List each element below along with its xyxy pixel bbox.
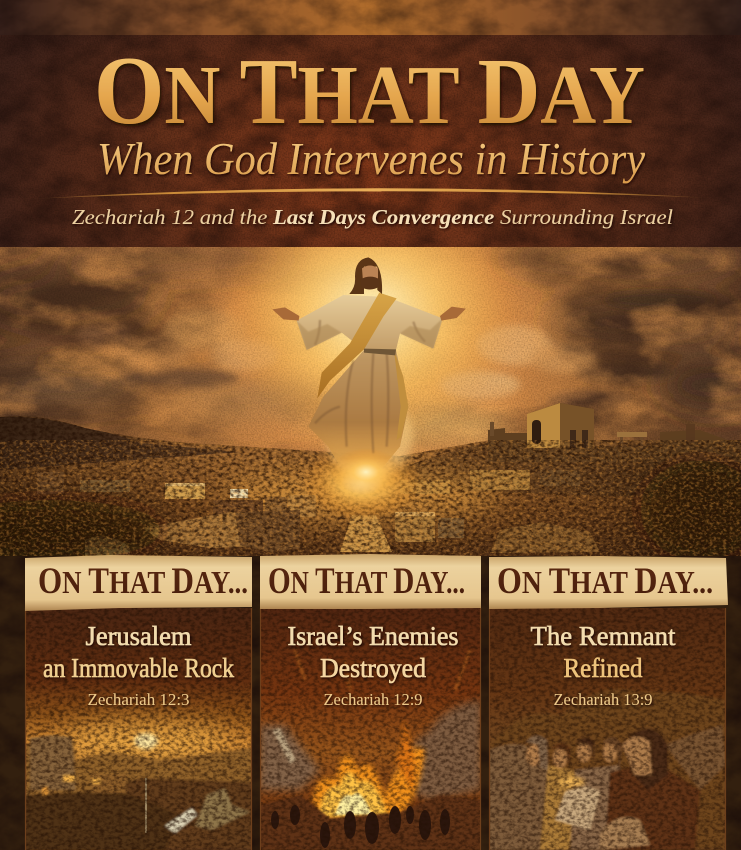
card 2 text: Zechariah 12:9: [324, 690, 422, 709]
card 3 text: [530, 621, 676, 709]
hero illustration: [0, 185, 741, 560]
sleeve shadow: [297, 321, 342, 350]
card 3 text: Refined: [564, 653, 643, 683]
robe body: [297, 295, 443, 477]
banner 2: ON THAT DAY...: [268, 561, 465, 602]
card 1 text: Zechariah 12:3: [88, 690, 190, 709]
card 1 text: Jerusalem: [86, 621, 192, 651]
billowing clouds: [40, 291, 715, 408]
card 3 text: Zechariah 13:9: [554, 690, 652, 709]
card 2 scene: [260, 608, 481, 850]
banner 1: [25, 555, 252, 611]
card 1 text: an Immovable Rock: [43, 653, 234, 683]
city ground: [0, 410, 741, 560]
dark foreground edges: [0, 460, 741, 560]
face: [362, 266, 378, 278]
subtitle: When God Intervenes in History: [97, 133, 646, 184]
banner 3: ON THAT DAY...: [497, 561, 713, 602]
robe folds: [315, 320, 425, 453]
tagline: Zechariah 12 and the Last Days Convergence Surrounding Israel: [72, 205, 673, 229]
lower background: [0, 556, 741, 850]
rubble and hill texture: [0, 410, 741, 560]
banner 1: ON THAT DAY...: [38, 561, 248, 602]
header panel: [0, 35, 741, 247]
panel: Jerusalem an Immovable Rock: [25, 554, 728, 850]
sky: [0, 244, 741, 462]
card 2 text: Israel’s Enemies: [288, 621, 458, 651]
card borders: [26, 608, 726, 850]
card 1 scene: [25, 608, 252, 850]
card 2 text: Destroyed: [320, 653, 426, 683]
hair: [349, 257, 382, 294]
card 3 scene: [489, 608, 726, 850]
card 1 text: [43, 621, 234, 709]
figure base glow: [336, 451, 396, 493]
top texture strip: [0, 0, 741, 36]
city buildings: [37, 470, 600, 556]
divider rule: [30, 188, 712, 199]
city flare: [306, 452, 420, 518]
hands: [272, 307, 299, 321]
main title: ON THAT DAY: [94, 37, 645, 145]
temple fortress: [488, 403, 741, 462]
card 2 text: [288, 621, 458, 709]
robed figure: [272, 257, 466, 477]
sash: [317, 293, 397, 398]
radiant glow: [238, 247, 504, 414]
card 3 text: The Remnant: [530, 621, 676, 651]
